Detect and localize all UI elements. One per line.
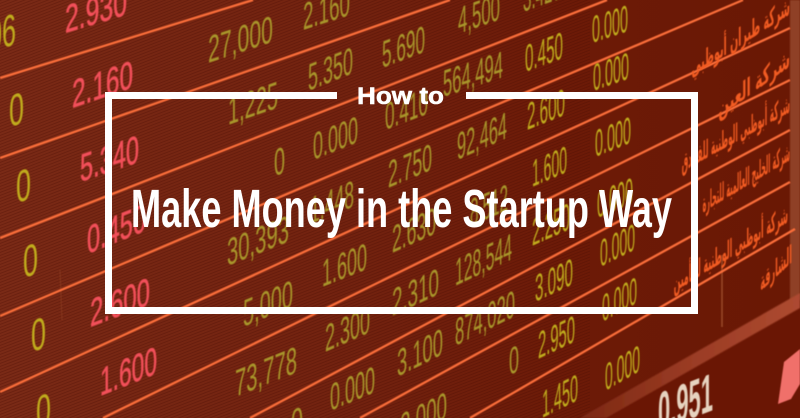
yellow figures, middle columns: 0.410	[385, 80, 428, 139]
yellow figures, right column pair	[525, 0, 640, 418]
yellow figures, middle columns: 92,464	[457, 105, 507, 169]
yellow figures, middle columns: 0.000	[330, 359, 375, 418]
yellow figures, right column pair: 1.600	[532, 138, 567, 196]
yellow figures, middle columns: 0	[274, 139, 285, 185]
yellow figures, middle columns: 8,512	[470, 176, 508, 235]
yellow figures, middle columns: 128,544	[455, 226, 512, 295]
yellow figures, middle columns: 874,020	[455, 282, 515, 354]
background: stock ticker board photo: 0.000	[595, 109, 631, 166]
yellow figures, right column pair: 2.950	[538, 307, 575, 368]
yellow figures, middle columns: 1,225	[228, 74, 278, 134]
yellow figures, middle columns: 2.630	[392, 200, 436, 262]
yellow figures, middle columns: 1.600	[322, 235, 367, 296]
label: How to: How to	[357, 83, 444, 110]
Arabic company names: الشارقة	[760, 239, 792, 298]
yellow zero column: 0	[31, 306, 46, 362]
Arabic company names: شركة أبوظبي الوطنية للتأمين	[674, 197, 788, 299]
yellow figures, middle columns: 73,778	[235, 339, 297, 406]
yellow figures, middle columns: 0.000	[313, 108, 358, 169]
red price column: 0.450	[87, 195, 146, 263]
yellow figures, middle columns: 2.750	[388, 136, 432, 197]
background: stock ticker board photo: 0.000	[605, 336, 640, 399]
yellow figures, right column pair: 0.450	[525, 24, 563, 81]
yellow zero column: 0	[16, 158, 31, 213]
Arabic company names	[674, 0, 792, 299]
right edge strip of the board	[790, 0, 800, 300]
background: stock ticker board photo: 0.000	[602, 268, 637, 330]
red price column: 1.600	[100, 338, 157, 405]
background: stock ticker board photo: 0.000	[597, 170, 633, 227]
yellow figures, middle columns: 0	[509, 337, 519, 384]
frame	[108, 96, 694, 310]
yellow figures, right column pair: 2.600	[527, 81, 565, 139]
Arabic company names: شركة الخليج العالمية للتجارة	[703, 138, 790, 219]
red glyph at lower right	[778, 349, 800, 404]
Arabic company names: شركة أبوظبي الوطنية للفنادق	[682, 86, 790, 178]
red price column: 2.160	[72, 53, 133, 117]
board lower edge band	[580, 293, 800, 418]
yellow figures, middle columns: 5,000	[243, 272, 293, 336]
yellow figures, middle columns: 1.448	[310, 173, 354, 233]
yellow figures, middle columns: 2.300	[325, 299, 370, 361]
vertical divider lines	[60, 255, 722, 327]
yellow figures, middle columns: 3.100	[397, 320, 443, 385]
yellow zero column: 0	[23, 232, 38, 288]
yellow figures, middle columns: 2.310	[392, 261, 439, 325]
yellow zero column: 0	[9, 82, 24, 137]
yellow figures, middle columns: 5.690	[382, 18, 425, 77]
background: stock ticker board photo: 0.000	[593, 45, 629, 100]
yellow figures, right column pair: 3.090	[535, 251, 573, 311]
yellow figures, middle columns	[208, 0, 561, 418]
red price column	[65, 0, 157, 405]
lower dark panel below the board	[606, 308, 800, 418]
yellow figures, middle columns: 5.350	[308, 39, 353, 100]
Arabic company names: شركة العين	[718, 43, 790, 124]
red price column: 5.340	[80, 128, 139, 191]
yellow figures, right column pair: 2.250	[532, 196, 570, 255]
yellow figures, middle columns: 564,494	[443, 44, 503, 106]
background: stock ticker board photo: 0.000	[600, 216, 635, 275]
yellow figures, middle columns: 30,393	[227, 208, 289, 275]
red price column: 2.600	[90, 268, 150, 336]
yellow zero column	[0, 3, 51, 418]
